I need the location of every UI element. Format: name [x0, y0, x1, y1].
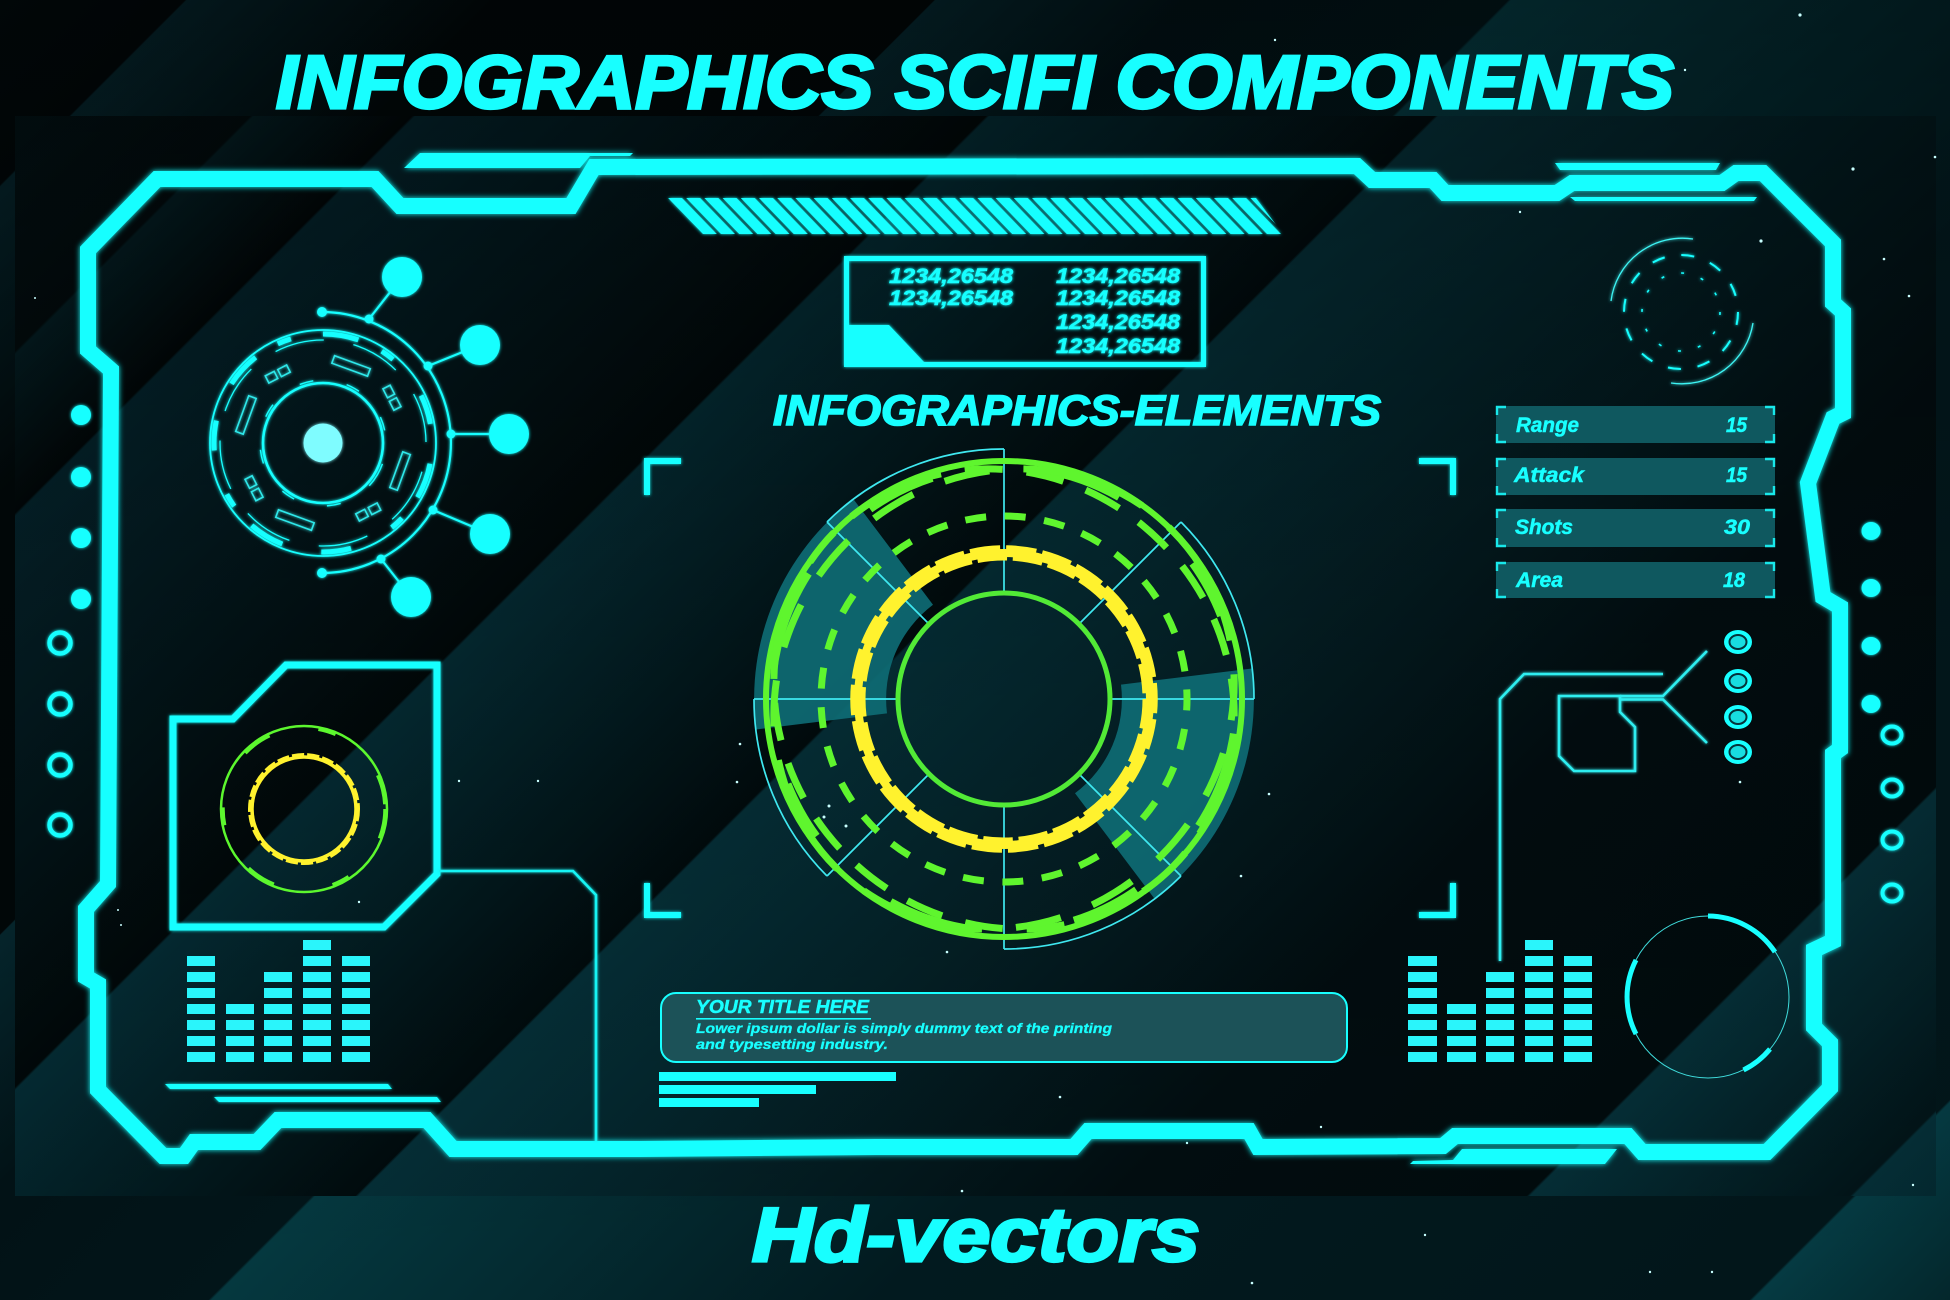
row: range: 15 [1726, 414, 1747, 437]
row: area: Area [1515, 569, 1563, 592]
number readouts: 1234,26548 [1056, 287, 1180, 310]
left side rings [50, 632, 70, 836]
row: shots [1496, 509, 1775, 547]
panel: small gauge frame [173, 665, 596, 1141]
number readouts: 1234,26548 [889, 287, 1013, 310]
progress bars [659, 1072, 896, 1107]
circuit diagram [1500, 651, 1707, 961]
row: area [1496, 562, 1775, 598]
outer green rings [679, 374, 1329, 1024]
hub segment boxes [236, 356, 410, 530]
hub nodes [317, 257, 529, 617]
number readouts: 1234,26548 [1056, 265, 1180, 288]
left equalizer bars [187, 940, 370, 1062]
dashed target circle [1611, 238, 1753, 384]
hub centre [304, 424, 342, 462]
yellow ring [855, 550, 1153, 848]
dial spokes and outer arcs [754, 449, 1254, 949]
main hud frame [86, 153, 1843, 1164]
corner brackets [647, 461, 1453, 915]
row: area: 18 [1723, 569, 1745, 592]
title box background [661, 993, 1347, 1062]
box heading: YOUR TITLE HERE [696, 996, 870, 1017]
hub rings [191, 311, 455, 575]
row: attack: 15 [1726, 464, 1747, 487]
row: shots: Shots [1515, 516, 1573, 539]
row: attack: Attack [1513, 464, 1585, 487]
hub connectors and outer arc [322, 277, 509, 597]
striped bar [668, 198, 1283, 234]
number readouts [889, 265, 1180, 358]
segmented ring gauge [1627, 916, 1789, 1078]
number readouts: 1234,26548 [889, 265, 1013, 288]
right equalizer bars [1408, 940, 1592, 1062]
right side dots [1862, 522, 1880, 713]
target bullets [1724, 630, 1752, 764]
row: range: Range [1516, 414, 1579, 437]
box heading underline [696, 1018, 871, 1020]
row: shots: 30 [1724, 516, 1750, 539]
row: range [1496, 406, 1775, 443]
row: attack [1496, 458, 1775, 495]
title: INFOGRAPHICS SCIFI COMPONENTS [276, 40, 1674, 124]
center heading: INFOGRAPHICS-ELEMENTS [773, 387, 1381, 435]
panel: main dial [679, 374, 1329, 1024]
box body text: Lower ipsum dollar is simply dummy text of the printing [696, 1020, 1112, 1036]
dial wedges [754, 499, 1254, 899]
inner green ring [898, 593, 1110, 805]
panel: stats rows [1496, 406, 1775, 598]
number readouts: 1234,26548 [1056, 311, 1180, 334]
footer credit: Hd-vectors [752, 1193, 1200, 1278]
number readouts: 1234,26548 [1056, 335, 1180, 358]
left side dots [71, 405, 91, 609]
gauge frame outline [173, 665, 437, 927]
numbers box outline [846, 258, 1204, 364]
box body text line two: and typesetting industry. [696, 1036, 888, 1052]
panel: title box [661, 993, 1347, 1062]
middle dashed green ring [812, 507, 1196, 891]
gauge rings [221, 726, 387, 892]
left underline accents [165, 1084, 441, 1102]
right side rings [1882, 726, 1902, 902]
connector line [439, 871, 596, 1141]
panel: radial node hub [191, 257, 529, 617]
panel: numbers box [846, 258, 1204, 364]
